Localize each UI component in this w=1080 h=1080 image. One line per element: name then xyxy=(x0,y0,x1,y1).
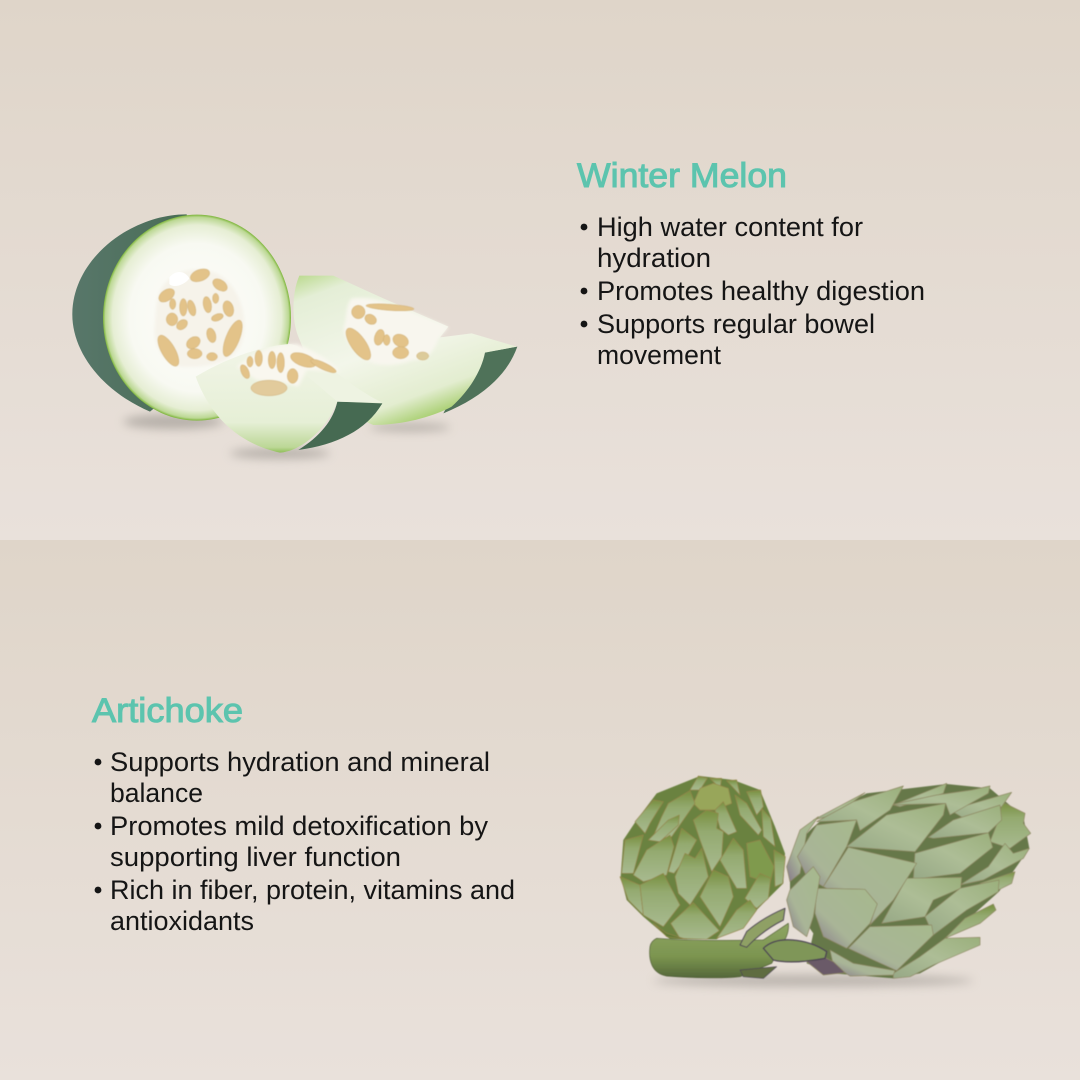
list: winter melon benefits: movement xyxy=(597,340,721,370)
list: artichoke benefits: supporting liver function xyxy=(110,842,401,872)
list: artichoke benefits: Rich in fiber, protein, vitamins and xyxy=(110,875,515,905)
right artichoke xyxy=(787,783,1031,978)
list: winter melon benefits xyxy=(581,212,925,370)
list: artichoke benefits: Promotes mild detoxification by xyxy=(110,811,488,841)
panel: winter melon background xyxy=(0,0,1080,540)
melon front wedge xyxy=(196,344,382,453)
melon ground shadows xyxy=(123,414,450,459)
heading: Artichoke: Artichoke xyxy=(92,692,243,730)
list: artichoke benefits: balance xyxy=(110,778,203,808)
illustration: artichokes xyxy=(620,776,1031,987)
left artichoke xyxy=(620,776,785,939)
list: winter melon benefits: High water content for xyxy=(597,212,863,242)
list: winter melon benefits: hydration xyxy=(597,243,711,273)
heading: Winter Melon: Winter Melon xyxy=(577,157,787,195)
list: artichoke benefits: antioxidants xyxy=(110,906,254,936)
illustration: winter melon pieces xyxy=(72,214,517,459)
list: winter melon benefits: Promotes healthy digestion xyxy=(597,276,925,306)
list: winter melon benefits: Supports regular bowel xyxy=(597,309,875,339)
artichoke stem xyxy=(650,908,827,978)
melon large wedge xyxy=(293,276,517,425)
list: artichoke benefits xyxy=(95,747,515,936)
list: artichoke benefits: Supports hydration and mineral xyxy=(110,747,490,777)
panel: artichoke background xyxy=(0,540,1080,1080)
artichoke ground shadow xyxy=(653,975,973,987)
melon round slice xyxy=(72,214,291,421)
